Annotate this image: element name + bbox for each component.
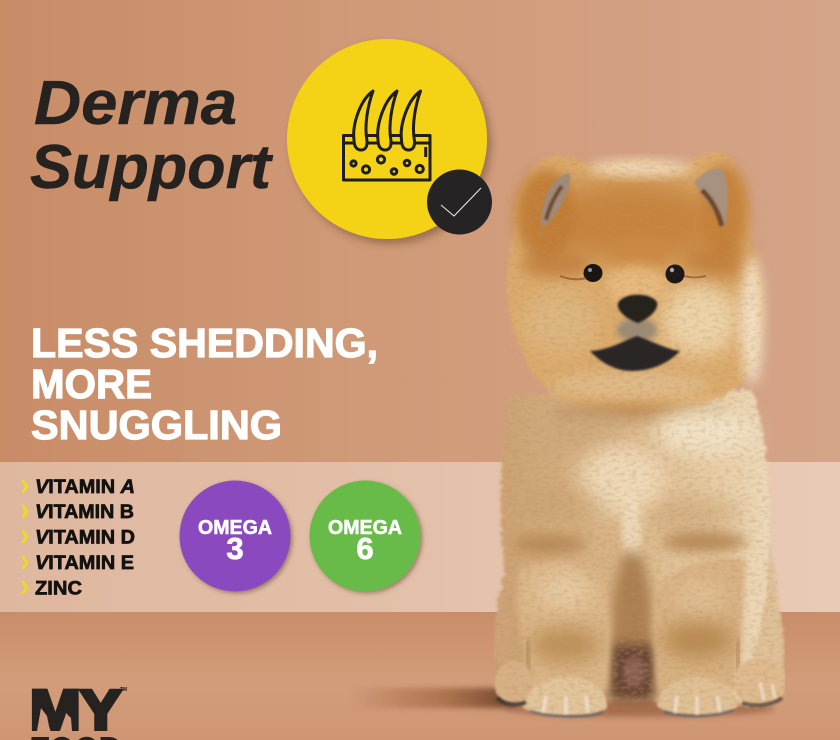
list chevrons bbox=[21, 480, 28, 594]
silhouette bbox=[494, 152, 784, 706]
logo: My Food: MY bbox=[30, 678, 121, 740]
chest fur shading bbox=[514, 408, 755, 564]
floor shadow under puppy bbox=[350, 688, 775, 717]
headline: MORE bbox=[31, 361, 152, 407]
gap between legs bbox=[610, 550, 654, 700]
list item: vitamin A: VITAMIN A bbox=[35, 477, 135, 498]
head fur shading bbox=[516, 160, 763, 421]
badge: omega 3 bbox=[180, 480, 290, 592]
badge: omega 6: OMEGA bbox=[328, 517, 402, 539]
headline: LESS SHEDDING, bbox=[31, 320, 378, 366]
front legs bbox=[518, 557, 745, 690]
title: Derma bbox=[34, 69, 237, 138]
leg shading bbox=[527, 572, 739, 690]
list item: zinc: ZINC bbox=[35, 578, 82, 600]
badge: omega 6: 6 bbox=[356, 531, 374, 566]
nutrient list bbox=[35, 477, 135, 600]
title: Support bbox=[30, 133, 273, 202]
list item: vitamin D: VITAMIN D bbox=[35, 528, 135, 548]
haunches bbox=[494, 560, 540, 704]
nose and muzzle bbox=[590, 295, 680, 371]
floor bbox=[0, 612, 840, 740]
logo: My Food: TM bbox=[120, 687, 127, 693]
eyes bbox=[560, 264, 706, 284]
body bbox=[501, 390, 769, 700]
panel: nutrient band bbox=[0, 462, 840, 612]
inner ears bbox=[541, 169, 728, 230]
icon: skin follicles bbox=[344, 91, 430, 180]
icon badge: yellow skin and hair follicle bbox=[287, 39, 487, 239]
head and ears bbox=[507, 152, 763, 414]
back paws bbox=[495, 658, 785, 706]
headline: SNUGGLING bbox=[31, 402, 282, 448]
badge: omega 3: OMEGA bbox=[198, 517, 272, 539]
title bbox=[30, 69, 273, 202]
badge: omega 6 bbox=[310, 480, 420, 592]
badge: omega 3: 3 bbox=[226, 531, 244, 566]
list item: vitamin B: VITAMIN B bbox=[35, 502, 134, 523]
puppy illustration bbox=[494, 152, 785, 716]
list item: vitamin E: VITAMIN E bbox=[35, 553, 134, 574]
front paws bbox=[523, 677, 738, 716]
headline bbox=[31, 320, 378, 448]
check badge bbox=[427, 170, 492, 234]
paw toes and claws bbox=[497, 682, 782, 716]
